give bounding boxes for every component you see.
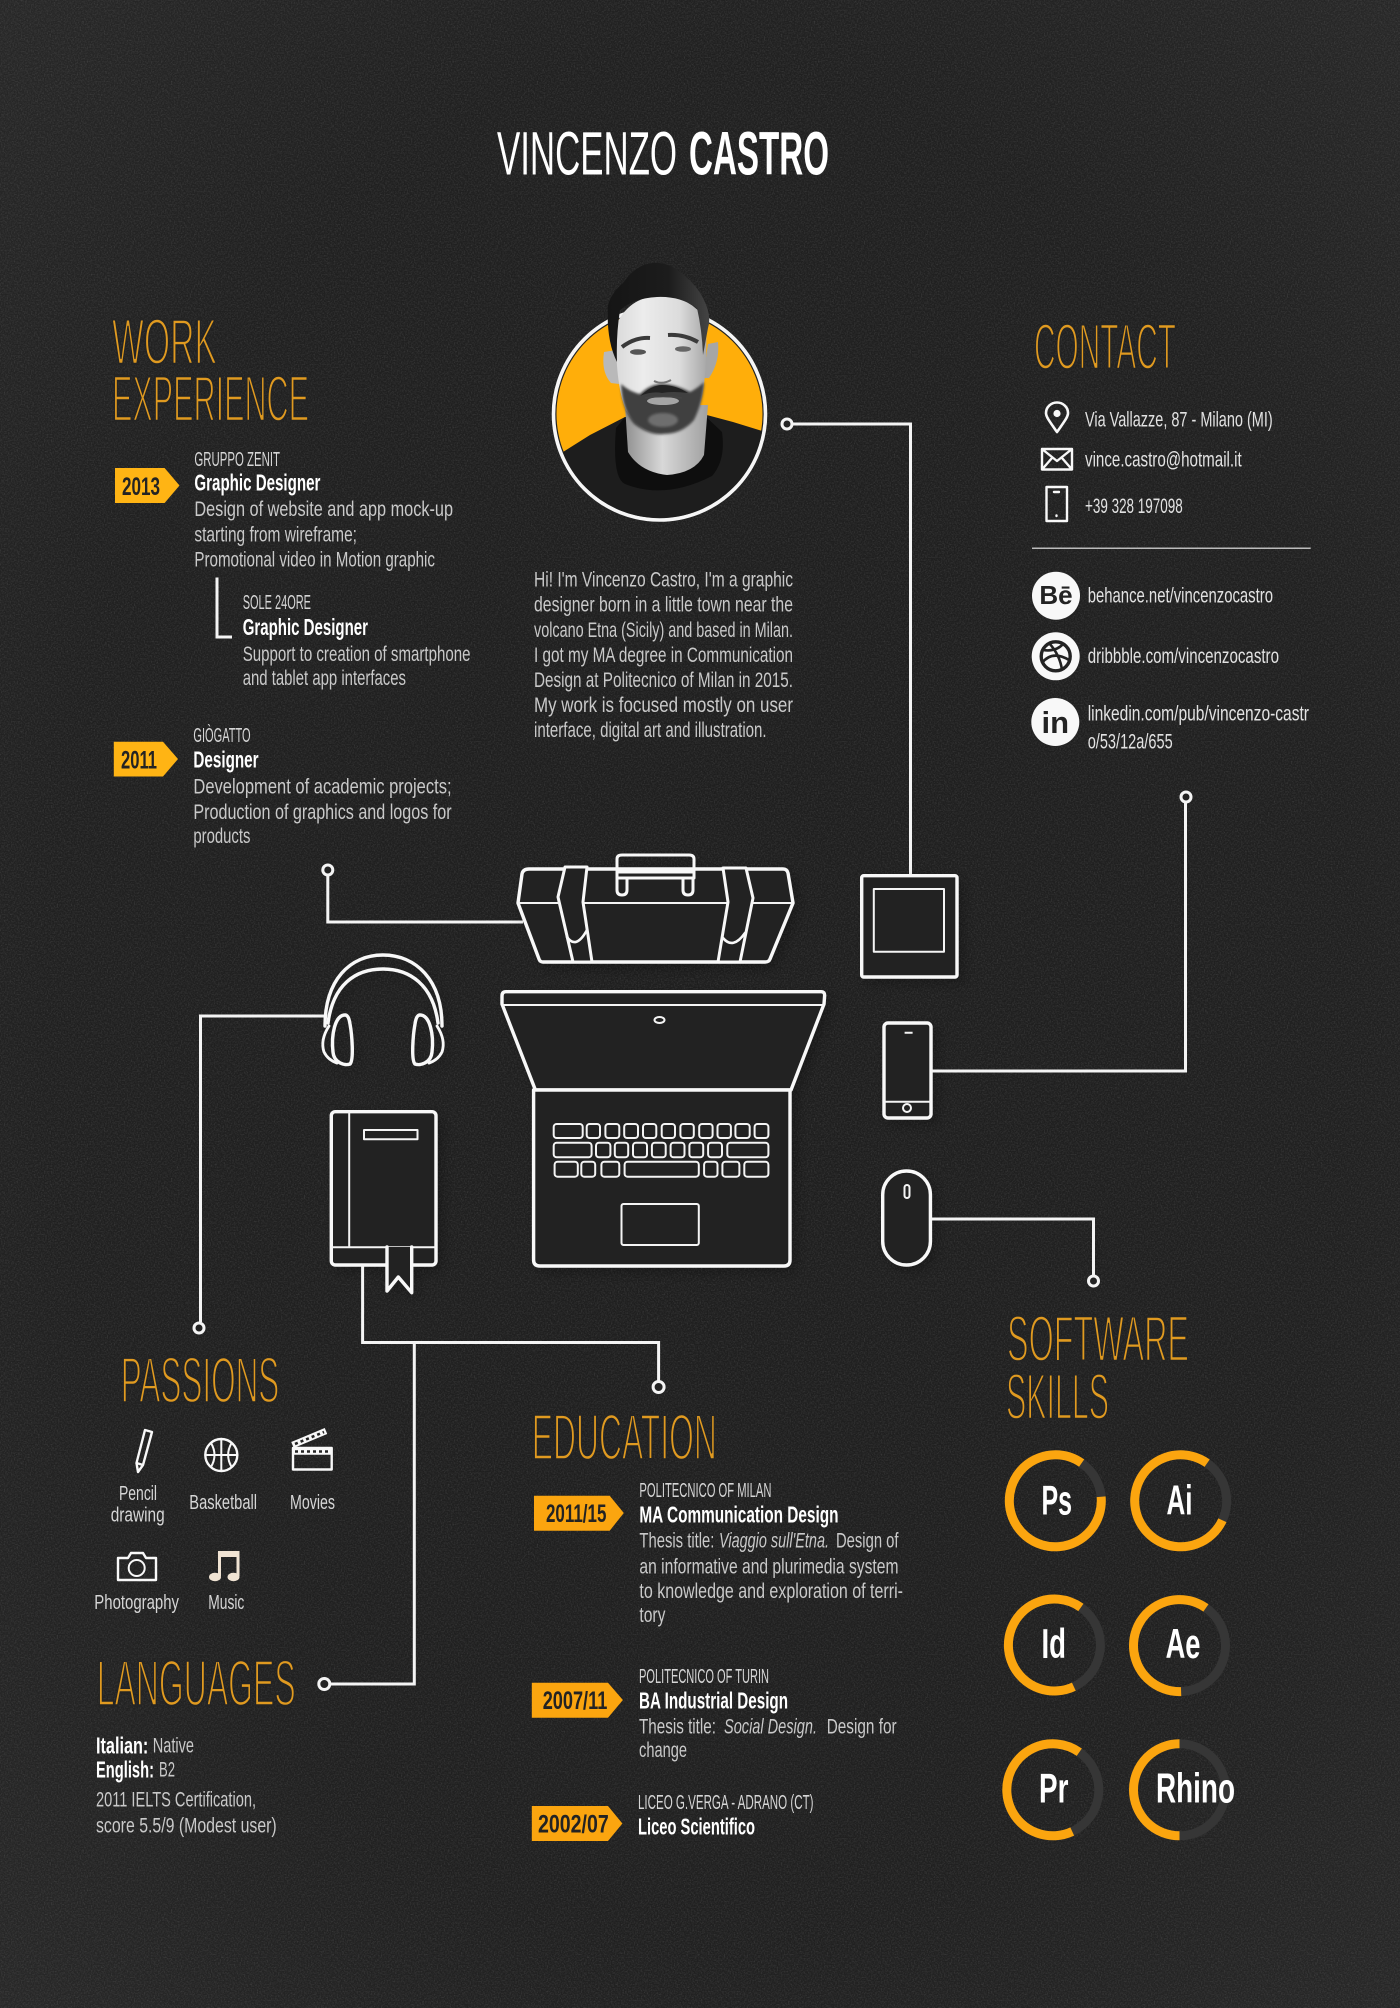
job: Giogatto: Designer bbox=[193, 746, 259, 772]
text: LANGUAGES bbox=[97, 1647, 296, 1720]
icon: behance: Bē bbox=[1039, 580, 1073, 610]
icon: basketball bbox=[205, 1439, 237, 1471]
degree: Politecnico of Milan: an informative and plurimedia system bbox=[639, 1555, 898, 1578]
icon: mobile bbox=[1046, 487, 1067, 521]
languages list: English: bbox=[96, 1756, 154, 1782]
title: CASTRO bbox=[689, 120, 829, 188]
year tag: 2002/07: 2002/07 bbox=[538, 1810, 609, 1838]
bio text: Hi! I'm Vincenzo Castro, I'm a graphic bbox=[534, 568, 793, 592]
ring: Rhino bbox=[1134, 1744, 1235, 1836]
ring: InDesign bbox=[993, 1584, 1116, 1706]
label: pencil drawing bbox=[111, 1483, 165, 1527]
beard bbox=[621, 382, 704, 434]
icon: book bbox=[331, 1112, 436, 1293]
section: software skills bbox=[992, 1302, 1242, 1851]
sub-job bracket bbox=[217, 578, 232, 637]
keyboard bbox=[554, 1124, 768, 1177]
icon: headphones bbox=[323, 955, 443, 1065]
ring: Rhino: Rhino bbox=[1156, 1765, 1235, 1812]
label: pencil drawing: Pencil bbox=[119, 1483, 157, 1505]
icon: location pin bbox=[1046, 403, 1068, 432]
face bbox=[616, 296, 706, 434]
degree: Politecnico of Turin: Design for bbox=[827, 1715, 897, 1738]
job: Gruppo Zenit bbox=[194, 449, 453, 572]
job: Gruppo Zenit: starting from wireframe; bbox=[194, 524, 357, 547]
degree: Politecnico of Turin: change bbox=[639, 1739, 687, 1762]
year tag: 2011/15 bbox=[534, 1496, 624, 1531]
languages list: Italian: bbox=[96, 1732, 148, 1758]
icon: music note bbox=[209, 1551, 240, 1581]
section: education bbox=[532, 1401, 903, 1841]
heading: software skills bbox=[1006, 1302, 1189, 1433]
degree: Politecnico of Milan: to knowledge and exploration of terri- bbox=[639, 1580, 903, 1603]
section: contact bbox=[1031, 310, 1311, 753]
label: photography: Photography bbox=[94, 1592, 179, 1614]
icon: linkedin bbox=[1031, 698, 1079, 746]
ears bbox=[603, 342, 718, 384]
label: pencil drawing: drawing bbox=[111, 1505, 165, 1527]
degree: Politecnico of Milan bbox=[639, 1480, 903, 1627]
heading: work experience bbox=[112, 305, 309, 435]
degree: Politecnico of Milan: tory bbox=[639, 1604, 666, 1627]
connector: mouse to software skills bbox=[930, 1219, 1098, 1286]
section: languages bbox=[96, 1647, 296, 1837]
degree: Liceo Scientifico: LICEO G.VERGA - ADRANO (CT) bbox=[638, 1792, 814, 1814]
degree: Politecnico of Milan: POLITECNICO OF MILAN bbox=[639, 1480, 772, 1502]
languages list: score 5.5/9 (Modest user) bbox=[96, 1814, 277, 1837]
icon: linkedin: in bbox=[1042, 705, 1069, 740]
year tag: 2011/15: 2011/15 bbox=[546, 1500, 606, 1528]
ring: Photoshop: Ps bbox=[1042, 1476, 1072, 1523]
job: Sole 24ore: and tablet app interfaces bbox=[243, 667, 406, 690]
heading: work experience: WORK bbox=[112, 305, 217, 378]
behance link: behance.net/vincenzocastro bbox=[1088, 585, 1273, 608]
icon: briefcase bbox=[518, 855, 793, 962]
languages list: Native bbox=[153, 1734, 194, 1757]
phone number: +39 328 197098 bbox=[1085, 495, 1183, 518]
portrait photo bbox=[552, 263, 768, 522]
ring: After Effects: Ae bbox=[1166, 1620, 1200, 1667]
bio text: My work is focused mostly on user bbox=[534, 694, 793, 717]
job: Giogatto: products bbox=[193, 825, 250, 848]
year tag: 2007/11: 2007/11 bbox=[543, 1687, 607, 1715]
languages list bbox=[96, 1732, 277, 1837]
divider bbox=[1032, 547, 1311, 549]
ring: Illustrator: Ai bbox=[1166, 1476, 1192, 1523]
section: passions: PASSIONS bbox=[121, 1343, 279, 1416]
section: education: EDUCATION bbox=[532, 1401, 717, 1474]
year tag: 2013 bbox=[115, 468, 180, 503]
label: movies: Movies bbox=[290, 1492, 335, 1514]
icon: movie clapper bbox=[292, 1431, 332, 1470]
job: Gruppo Zenit: Promotional video in Motion graphic bbox=[194, 549, 435, 572]
languages list: 2011 IELTS Certification, bbox=[96, 1789, 256, 1812]
connector: headphones to passions bbox=[194, 1016, 325, 1333]
job: Sole 24ore: SOLE 24ORE bbox=[243, 592, 311, 614]
ring: InDesign: Id bbox=[1042, 1620, 1066, 1667]
job: Giogatto: Production of graphics and logos for bbox=[193, 801, 452, 824]
email: vince.castro@hotmail.it bbox=[1085, 449, 1242, 472]
ring: Premiere: Pr bbox=[1039, 1765, 1068, 1812]
icon: tablet bbox=[862, 876, 957, 977]
ring: Photoshop bbox=[1005, 1451, 1105, 1551]
hair bbox=[608, 263, 709, 362]
job: Sole 24ore bbox=[243, 592, 470, 690]
degree: Politecnico of Milan: Viaggio sull'Etna. bbox=[719, 1529, 829, 1552]
degree: Politecnico of Turin: Social Design. bbox=[724, 1715, 817, 1738]
connector: briefcase to work experience bbox=[323, 865, 523, 922]
linkedin link: o/53/12a/655 bbox=[1088, 730, 1173, 753]
degree: Politecnico of Turin: Thesis title: bbox=[639, 1715, 716, 1738]
ring: Illustrator bbox=[1120, 1440, 1242, 1562]
job: Giogatto: Development of academic projects; bbox=[193, 775, 452, 798]
icon: behance bbox=[1032, 572, 1080, 620]
job: Sole 24ore: Support to creation of smartphone bbox=[243, 643, 470, 666]
trackpad bbox=[622, 1204, 699, 1245]
year tag: 2011 bbox=[114, 742, 178, 776]
bio text: Design at Politecnico of Milan in 2015. bbox=[534, 669, 793, 692]
bio text bbox=[534, 568, 793, 742]
icon: envelope bbox=[1042, 449, 1072, 470]
section: work experience bbox=[112, 305, 470, 848]
section: contact: CONTACT bbox=[1034, 310, 1176, 383]
degree: Politecnico of Turin: BA Industrial Design bbox=[639, 1687, 788, 1713]
degree: Liceo Scientifico bbox=[638, 1792, 814, 1839]
degree: Politecnico of Milan: Design of bbox=[836, 1529, 899, 1552]
dribbble link: dribbble.com/vincenzocastro bbox=[1088, 645, 1279, 668]
label: music: Music bbox=[208, 1592, 244, 1614]
eyes, brows and nose bbox=[622, 335, 698, 383]
section: passions bbox=[94, 1343, 335, 1614]
linkedin link: linkedin.com/pub/vincenzo-castr bbox=[1088, 703, 1309, 726]
degree: Liceo Scientifico: Liceo Scientifico bbox=[638, 1813, 755, 1839]
address: Via Vallazze, 87 - Milano (MI) bbox=[1085, 409, 1273, 432]
icon: phone bbox=[884, 1023, 931, 1118]
section: work experience: EXPERIENCE bbox=[112, 362, 309, 435]
neck bbox=[625, 405, 708, 475]
degree: Politecnico of Turin bbox=[639, 1666, 897, 1762]
heading: software skills: SKILLS bbox=[1006, 1360, 1109, 1433]
year tag: 2011: 2011 bbox=[121, 746, 157, 774]
degree: Politecnico of Milan: Thesis title: bbox=[639, 1529, 714, 1552]
title: VINCENZO bbox=[497, 120, 677, 188]
icon: camera bbox=[118, 1553, 156, 1580]
bio text: volcano Etna (Sicily) and based in Milan. bbox=[534, 619, 793, 642]
connector: book to education and languages bbox=[319, 1265, 664, 1690]
icon: laptop bbox=[502, 992, 825, 1266]
job: Sole 24ore: Graphic Designer bbox=[243, 614, 368, 640]
label: basketball: Basketball bbox=[189, 1492, 257, 1514]
linkedin link bbox=[1088, 703, 1309, 753]
degree: Politecnico of Turin: POLITECNICO OF TURIN bbox=[639, 1666, 769, 1688]
connector: phone to contact bbox=[931, 792, 1191, 1071]
languages list: B2 bbox=[159, 1758, 175, 1781]
bio text: I got my MA degree in Communication bbox=[534, 644, 793, 667]
icon: pencil bbox=[136, 1430, 152, 1472]
bio text: interface, digital art and illustration. bbox=[534, 719, 767, 742]
job: Gruppo Zenit: GRUPPO ZENIT bbox=[194, 449, 280, 471]
bio text: designer born in a little town near the bbox=[534, 594, 793, 616]
degree: Politecnico of Milan: MA Communication Design bbox=[639, 1502, 838, 1528]
sweater bbox=[562, 415, 762, 518]
year tag: 2013: 2013 bbox=[122, 473, 160, 501]
section: software skills: SOFTWARE bbox=[1007, 1302, 1189, 1375]
job: Gruppo Zenit: Design of website and app mock-up bbox=[194, 498, 453, 521]
job: Giogatto: GIÒGATTO bbox=[193, 724, 251, 747]
year tag: 2007/11 bbox=[532, 1683, 623, 1718]
icon: mouse bbox=[883, 1171, 930, 1265]
connector: photo to tablet bbox=[782, 419, 910, 887]
job: Giogatto bbox=[193, 724, 452, 848]
icon: dribbble bbox=[1032, 632, 1080, 680]
job: Gruppo Zenit: Graphic Designer bbox=[194, 470, 320, 496]
ring: After Effects bbox=[1132, 1598, 1227, 1693]
ring: Premiere bbox=[992, 1729, 1114, 1851]
collar bbox=[615, 414, 723, 490]
